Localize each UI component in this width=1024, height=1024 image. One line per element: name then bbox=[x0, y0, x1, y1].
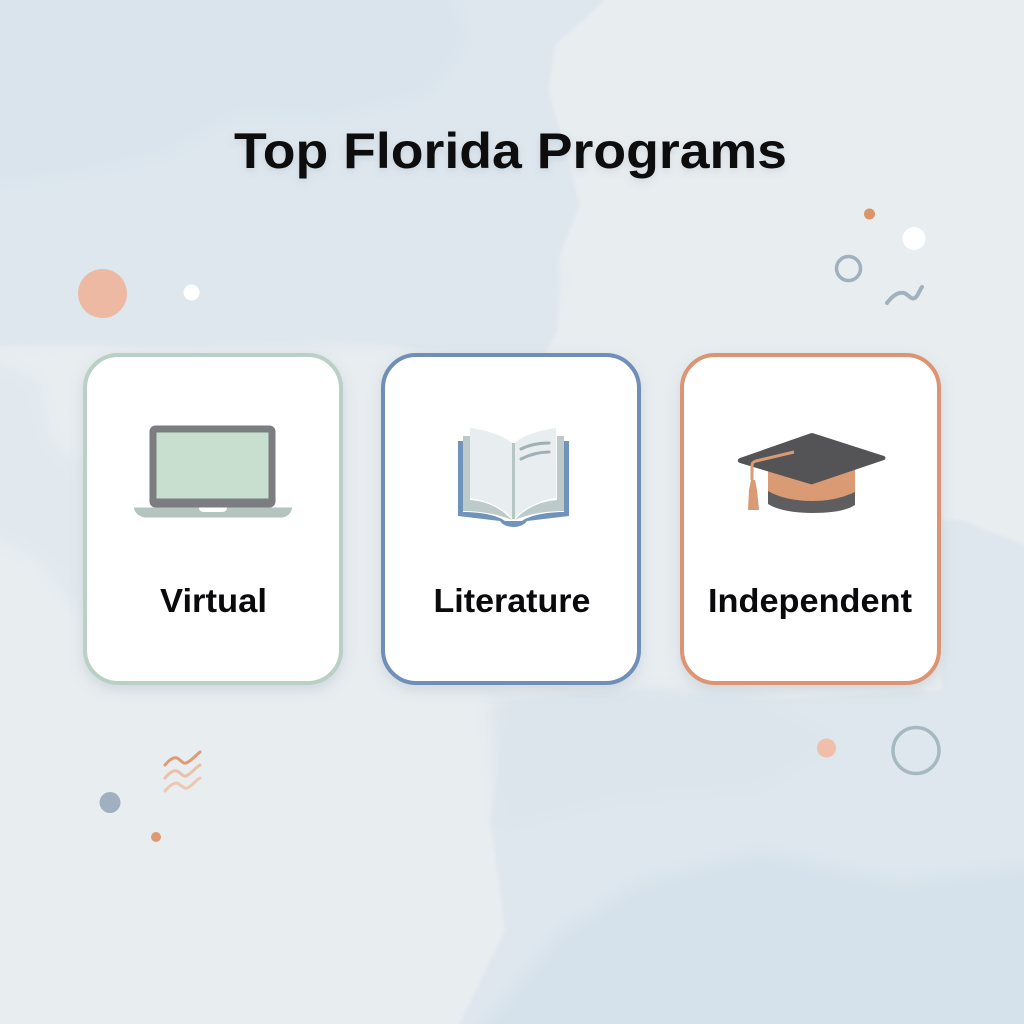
peach dot bbox=[817, 738, 836, 758]
card: Virtual bbox=[85, 355, 341, 683]
decorative shapes: bottom right bbox=[817, 728, 939, 774]
icon: open book bbox=[458, 428, 569, 527]
grey-blue dot bbox=[100, 792, 120, 813]
decorative shapes: top right bbox=[836, 208, 926, 303]
title: Top Florida Programs bbox=[234, 123, 787, 179]
card: Literature bbox=[383, 355, 639, 683]
decorative shapes: bottom left bbox=[100, 752, 200, 842]
grey-green ring bbox=[893, 728, 939, 774]
grey squiggle bbox=[887, 287, 922, 303]
orange squiggles bbox=[165, 752, 200, 791]
grey ring bbox=[836, 256, 860, 280]
white dot bbox=[902, 227, 926, 250]
peach circle bbox=[78, 269, 127, 318]
label: Virtual: Virtual bbox=[160, 582, 267, 619]
icon: laptop bbox=[134, 426, 292, 518]
orange dot bbox=[864, 208, 875, 220]
label: Literature: Literature bbox=[434, 582, 590, 619]
icon: graduation cap bbox=[738, 433, 886, 513]
small white dot bbox=[184, 284, 200, 300]
decorative shapes: top left bbox=[78, 269, 200, 318]
orange dot bbox=[151, 832, 161, 842]
card: Independent bbox=[682, 355, 939, 683]
label: Independent: Independent bbox=[708, 582, 912, 619]
